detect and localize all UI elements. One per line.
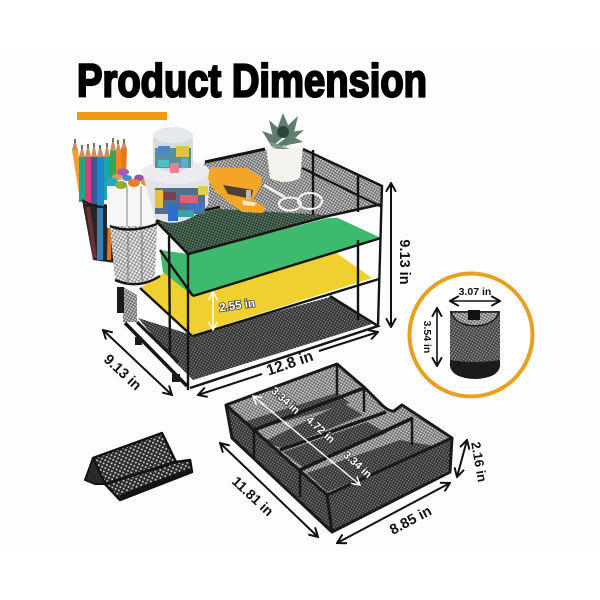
dimension: drawer width 8.85 in: 8.85 in: [387, 503, 435, 539]
dimension: drawer length 11.81 in: 11.81 in: [229, 473, 277, 519]
dimension: drawer height 2.16 in: [457, 440, 490, 483]
bottom mesh tray: [117, 287, 378, 388]
orange stapler: [208, 167, 265, 213]
label: 4.72 in: 4.72 in: [303, 414, 337, 446]
dimension: drawer height 2.16 in: 2.16 in: [468, 441, 490, 483]
dimension: 2.55 in: 2.55 in: [219, 298, 256, 314]
drawer wire rims and dividers: [226, 364, 452, 532]
dimension: drawer width 8.85 in: [337, 483, 450, 543]
drawer front face: [327, 438, 452, 532]
desk organizer: [72, 113, 382, 390]
label: 3.34 in lower: 3.34 in: [340, 449, 374, 481]
label: 3.34 in upper: 3.34 in: [268, 385, 302, 417]
dimension: drawer length 11.81 in: [220, 443, 318, 537]
pencil cup: [72, 138, 127, 263]
wire frame and rails: [140, 149, 382, 390]
dimension: depth 9.13 in: 9.13 in: [100, 352, 144, 394]
title: Product Dimension: [77, 54, 427, 106]
dimension: depth 9.13 in: [100, 330, 172, 395]
mesh cup: [450, 310, 500, 379]
title accent bar: [77, 112, 167, 120]
front mesh cup: [110, 224, 160, 284]
business card holder: [85, 433, 192, 500]
compartment floors: [240, 393, 440, 492]
marker pens: [106, 168, 155, 228]
dimension: 2.55 in: [213, 292, 256, 330]
top mesh tray: [156, 148, 382, 254]
drawer left face: [226, 405, 332, 532]
dimension: width 12.8 in: [198, 332, 378, 395]
green paper sheet: [160, 218, 381, 296]
drawer interior: [226, 364, 452, 495]
dimension: 3.54 in: 3.54 in: [421, 321, 433, 353]
dimension arrow: compartment lengths: [253, 396, 360, 485]
scissors: [264, 185, 322, 210]
dimension: height 9.13 in: 9.13 in: [396, 239, 412, 285]
callout: mesh cup dimensions: [410, 274, 532, 396]
callout ring: [410, 274, 532, 396]
dimension: 3.07 in: 3.07 in: [459, 286, 491, 298]
dimension: width 12.8 in: 12.8 in: [264, 348, 315, 380]
potted succulent: [262, 113, 304, 182]
yellow paper sheet: [140, 252, 372, 335]
clip jars: [142, 127, 210, 223]
mesh drawer organizer: [226, 364, 452, 532]
